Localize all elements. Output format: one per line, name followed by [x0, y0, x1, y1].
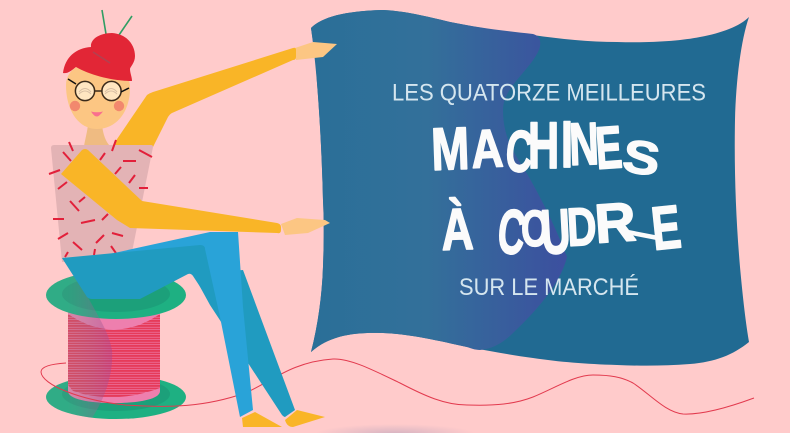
- raised arm: [113, 42, 337, 147]
- spool shadow: [46, 270, 112, 425]
- heading: les quatorze meilleures: LES QUATORZE MEILLEURES: [392, 80, 706, 106]
- neck: [84, 125, 110, 146]
- title: à coudre: D: [566, 197, 598, 258]
- thigh: [62, 245, 220, 317]
- title: machines: I: [561, 108, 573, 181]
- thread spool: [46, 270, 186, 425]
- far leg: [193, 270, 295, 417]
- face: [66, 62, 130, 129]
- title: machines: C: [503, 118, 536, 186]
- title: à coudre: O: [521, 201, 549, 258]
- title: machines: [430, 108, 663, 186]
- title: machines: E: [593, 113, 624, 182]
- hair: [63, 33, 135, 81]
- title: machines: M: [430, 116, 470, 184]
- sewing thread: [41, 359, 754, 414]
- floor shadow: [315, 424, 475, 433]
- lowered arm: [61, 149, 330, 235]
- title: machines: N: [568, 110, 600, 178]
- title: machines: S: [620, 129, 663, 186]
- title: à coudre: [440, 190, 684, 268]
- title: à coudre: C: [495, 195, 529, 268]
- title: à coudre: E: [648, 193, 684, 264]
- title: à coudre: U: [539, 197, 572, 268]
- title: à coudre: À: [440, 197, 475, 264]
- subheading: sur le marché: SUR LE MARCHÉ: [459, 274, 639, 301]
- spool top flange: [46, 271, 186, 319]
- title: machines: H: [528, 109, 559, 182]
- wound thread: [68, 314, 160, 397]
- title: à coudre: R: [592, 190, 638, 255]
- shoes: [242, 410, 325, 427]
- spool body: [68, 310, 160, 403]
- shirt: [51, 145, 153, 262]
- title: machines: A: [469, 118, 505, 180]
- cheeks: [70, 101, 124, 111]
- near leg: [105, 232, 253, 417]
- panel: blue fabric banner: [311, 10, 749, 366]
- closed eyes: [79, 88, 117, 94]
- smile: [91, 112, 103, 116]
- spool bottom flange: [46, 375, 186, 419]
- glasses: [68, 79, 129, 101]
- icon: knitting needles: [102, 10, 132, 35]
- shirt thread pattern: [49, 140, 152, 257]
